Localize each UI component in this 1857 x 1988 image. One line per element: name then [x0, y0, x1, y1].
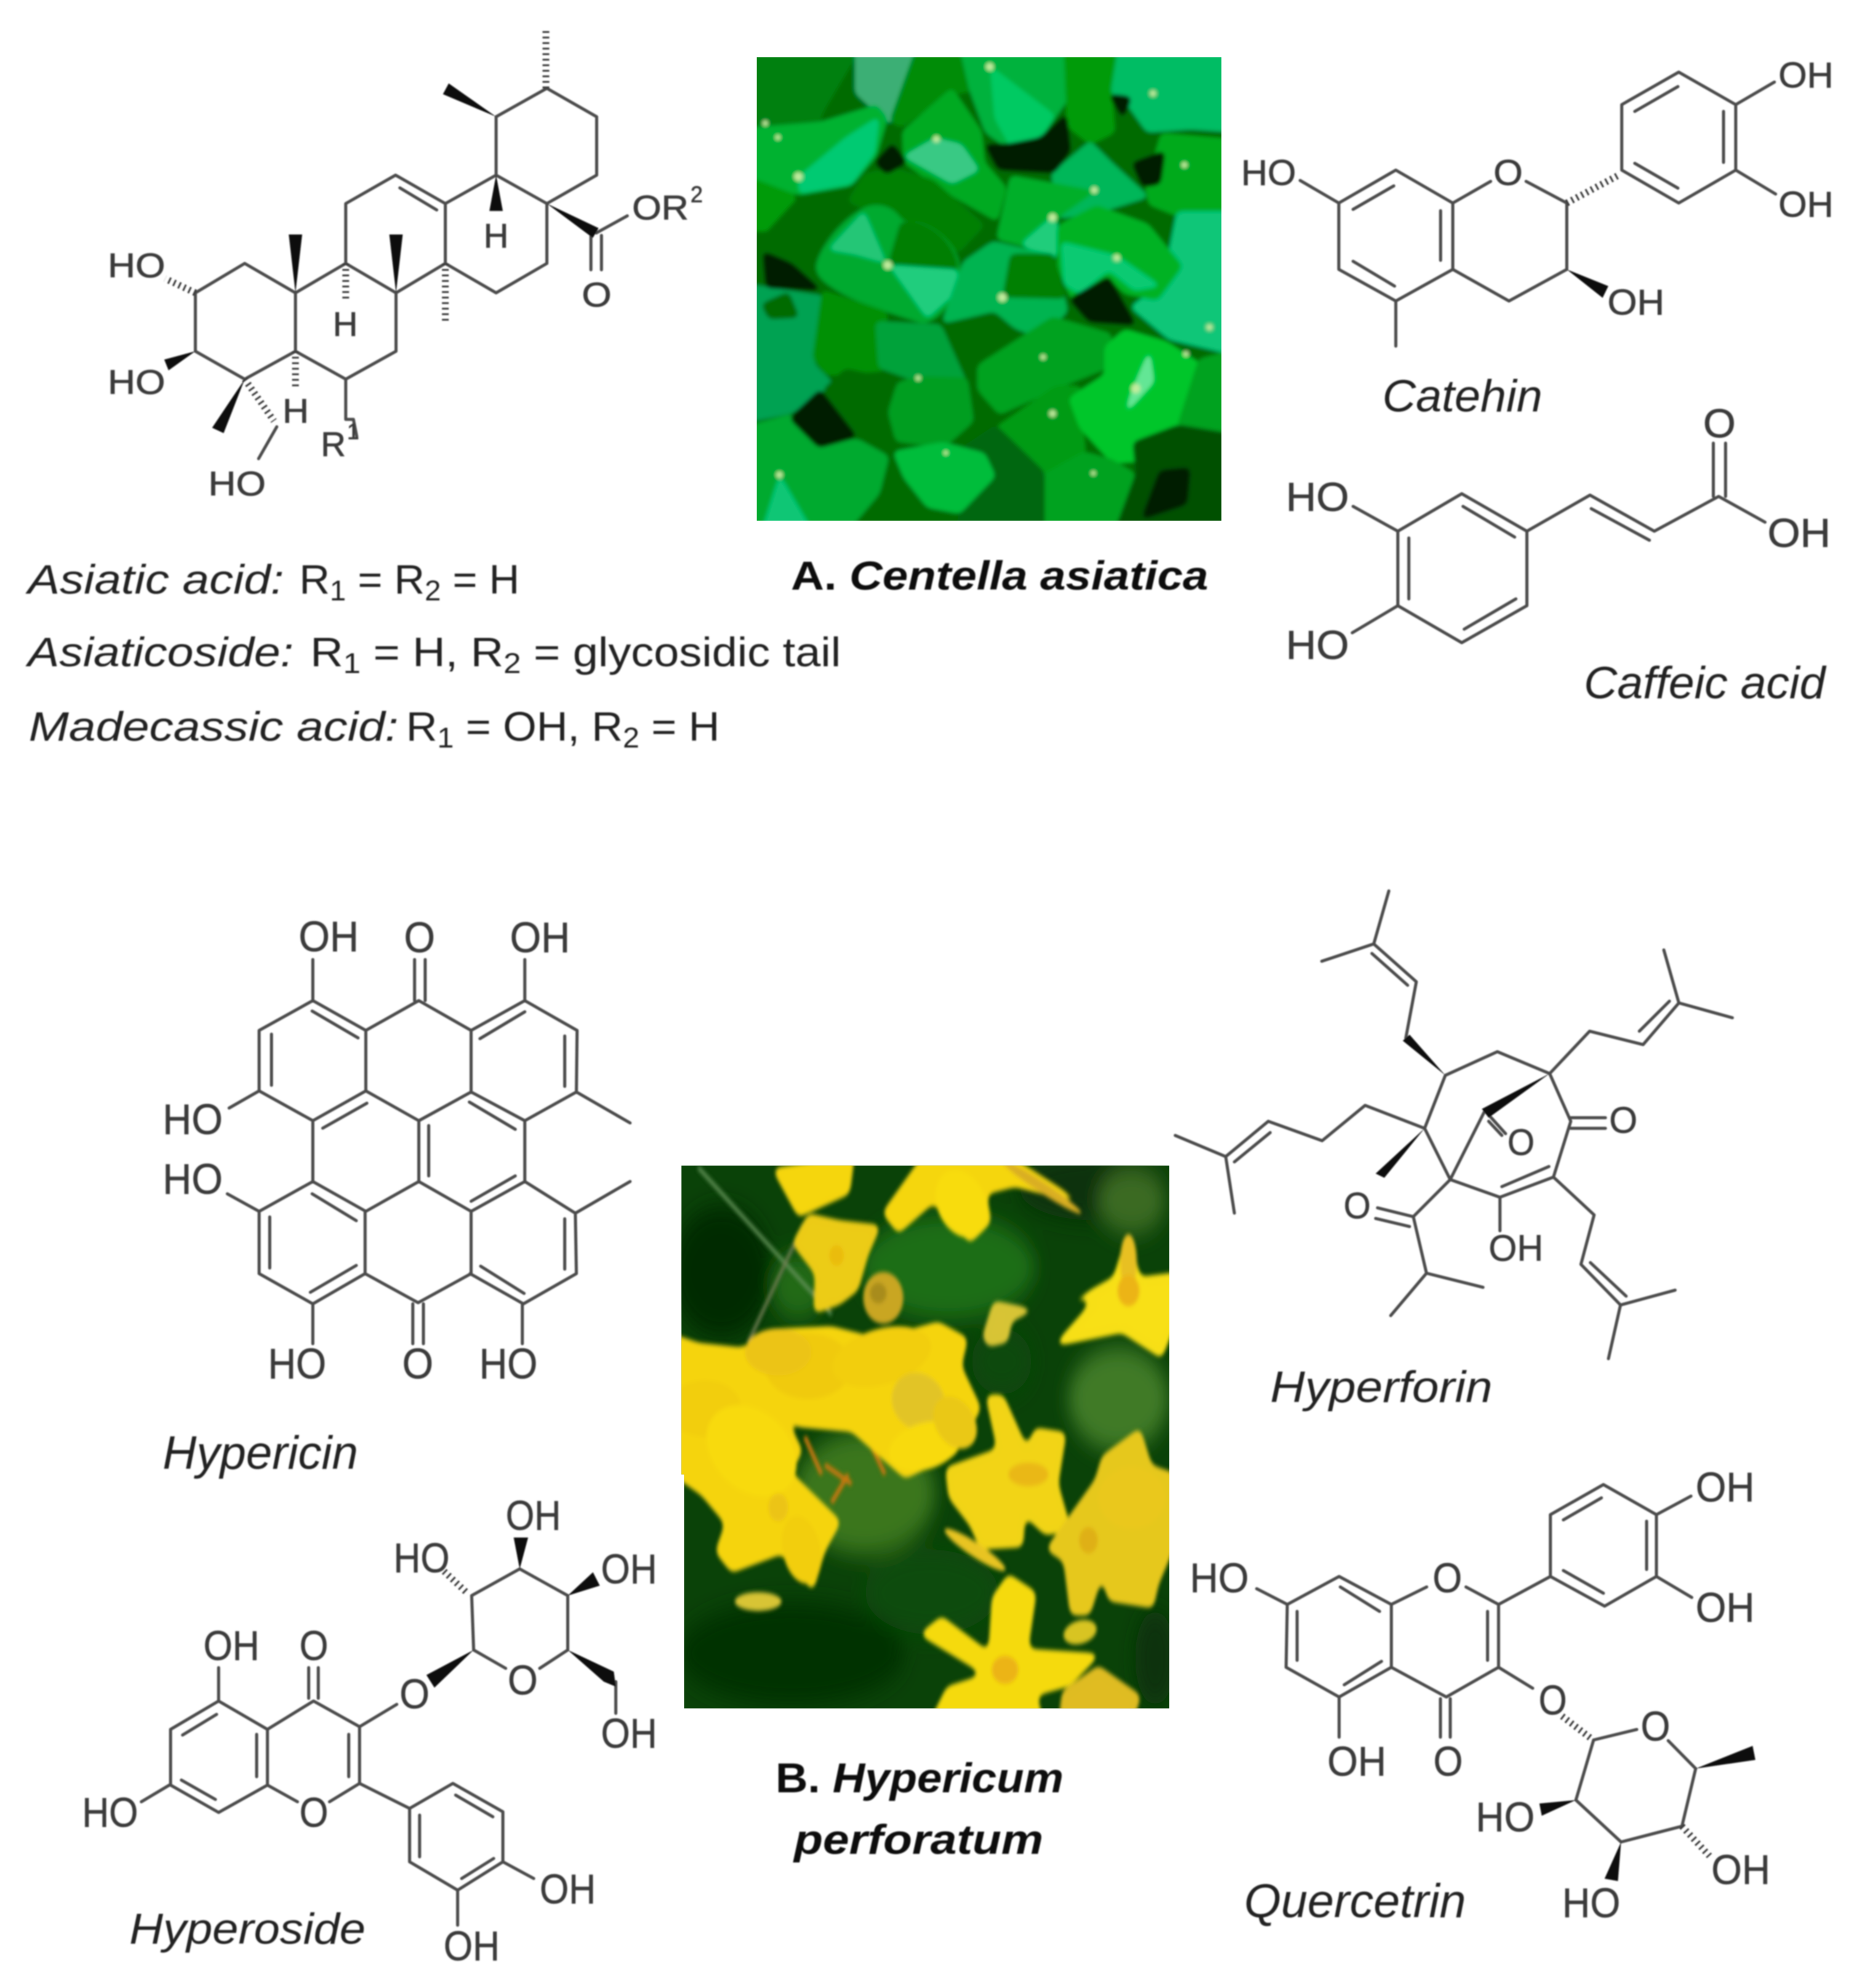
molecule: Hyperforin: O [1609, 1100, 1637, 1141]
molecule: Hypericin: O [404, 914, 435, 961]
molecule: Caffeic acid: O [1703, 401, 1736, 446]
text block: R-group definitions: R [406, 704, 435, 750]
photo: Hypericum perforatum flowers [668, 1154, 1179, 1724]
molecule: Hypericin: O [402, 1341, 433, 1388]
molecule: triterpene skeleton with R1 and R2: H [283, 391, 309, 430]
molecule: Catehin: HO [1241, 152, 1296, 193]
molecule: triterpene skeleton with R1 and R2: H [484, 217, 508, 255]
molecule: Hypericin: HO [162, 1156, 223, 1203]
text block: R-group definitions [25, 557, 841, 754]
molecule: Quercetrin: O [1434, 1738, 1463, 1785]
caption: A. Centella asiatica: A. Centella asiatica [791, 553, 1208, 598]
molecule: Hyperforin: Hyperforin [1270, 1362, 1493, 1412]
molecule: Hyperoside [82, 1492, 657, 1969]
molecule: triterpene skeleton with R1 and R2: 2 [691, 182, 703, 207]
molecule: Quercetrin: O [1539, 1677, 1567, 1724]
text block: R-group definitions: = OH, R [454, 704, 623, 750]
molecule: Catehin: OH [1778, 183, 1834, 224]
text block: R-group definitions: 1 [343, 647, 361, 679]
molecule: Hypericin: HO [162, 1096, 223, 1144]
molecule: Hypericin: HO [479, 1341, 537, 1388]
molecule: Hyperforin: O [1344, 1185, 1371, 1227]
molecule: Hypericin: Hypericin [162, 1426, 358, 1479]
molecule: triterpene skeleton with R1 and R2: R [321, 425, 346, 463]
molecule: Hyperforin [1175, 891, 1733, 1412]
text block: R-group definitions: Asiatic acid: [25, 557, 284, 603]
text block: R-group definitions: = H, R [361, 630, 503, 676]
text block: R-group definitions: 2 [425, 575, 441, 607]
molecule: triterpene skeleton with R1 and R2: O [582, 276, 612, 314]
molecule: Hypericin: OH [510, 914, 570, 961]
molecule: Quercetrin: HO [1476, 1794, 1534, 1841]
text block: R-group definitions: = H [441, 557, 519, 603]
molecule: Hyperoside: OH [601, 1710, 657, 1757]
molecule: Catehin: Catehin [1382, 371, 1542, 421]
molecule: Caffeic acid: HO [1286, 475, 1349, 520]
molecule: Catehin: OH [1778, 55, 1834, 95]
molecule: Caffeic acid: HO [1286, 623, 1349, 668]
text block: R-group definitions: R [310, 630, 339, 676]
caption: B. Hypericum perforatum [776, 1755, 1064, 1863]
molecule: triterpene skeleton with R1 and R2: HO [108, 246, 165, 284]
molecule: Hyperoside: OH [540, 1866, 596, 1912]
text block: R-group definitions: Asiaticoside: [25, 630, 294, 676]
molecule: Quercetrin: OH [1711, 1846, 1770, 1893]
molecule: Quercetrin: HO [1562, 1880, 1620, 1926]
molecule: Hypericin: OH [299, 913, 359, 961]
molecule: Quercetrin: HO [1190, 1555, 1249, 1601]
molecule: triterpene skeleton with R1 and R2: HO [208, 464, 266, 503]
photo: Centella asiatica leaves [757, 57, 1221, 521]
molecule: Hyperforin: OH [1489, 1228, 1543, 1269]
text block: R-group definitions: 1 [437, 722, 454, 754]
molecule: Quercetrin: Quercetrin [1244, 1875, 1466, 1928]
molecule: Quercetrin: O [1641, 1703, 1670, 1750]
text block: R-group definitions: R [299, 557, 328, 603]
molecule: triterpene skeleton with R1 and R2 [108, 30, 703, 503]
molecule: Catehin [1241, 55, 1834, 421]
molecule: Caffeic acid: Caffeic acid [1584, 657, 1827, 708]
molecule: Hyperoside: HO [393, 1534, 450, 1581]
text block: R-group definitions: Madecassic acid: [29, 704, 398, 750]
molecule: triterpene skeleton with R1 and R2: H [333, 305, 358, 343]
molecule: Hyperoside: OH [203, 1622, 260, 1669]
molecule: Hyperoside: HO [82, 1789, 138, 1836]
molecule: Hyperoside: O [300, 1622, 328, 1669]
molecule: Quercetrin: OH [1696, 1584, 1755, 1631]
text block: R-group definitions: 2 [623, 722, 640, 754]
molecule: Hyperoside: O [399, 1670, 430, 1717]
molecule: Hyperforin: O [1507, 1122, 1534, 1163]
molecule: Hyperoside: Hyperoside [129, 1905, 366, 1953]
molecule: Caffeic acid [1286, 401, 1831, 708]
text block: R-group definitions: 1 [330, 575, 346, 607]
molecule: Quercetrin: OH [1696, 1464, 1755, 1510]
text block: R-group definitions: = H [640, 704, 720, 750]
molecule: Hyperoside: OH [601, 1545, 657, 1592]
caption: B. Hypericum perforatum: B. Hypericum [776, 1755, 1064, 1802]
molecule: Quercetrin [1190, 1464, 1770, 1928]
molecule: triterpene skeleton with R1 and R2: 1 [347, 419, 359, 444]
molecule: Hyperoside: O [508, 1656, 538, 1703]
molecule: Hypericin [162, 913, 630, 1479]
molecule: Hypericin: HO [268, 1341, 326, 1388]
caption: B. Hypericum perforatum: perforatum [793, 1816, 1043, 1863]
text block: R-group definitions: = glycosidic tail [521, 630, 841, 676]
molecule: Hyperoside: O [300, 1789, 328, 1836]
molecule: triterpene skeleton with R1 and R2: OR [632, 188, 689, 226]
molecule: Hyperoside: OH [506, 1492, 561, 1539]
molecule: Catehin: OH [1608, 281, 1664, 323]
molecule: Quercetrin: O [1432, 1555, 1462, 1601]
text block: R-group definitions: 2 [503, 647, 521, 679]
molecule: Catehin: O [1493, 152, 1523, 193]
molecule: triterpene skeleton with R1 and R2: HO [108, 363, 165, 401]
molecule: Caffeic acid: OH [1768, 511, 1831, 556]
molecule: Quercetrin: OH [1327, 1738, 1386, 1785]
molecule: Hyperoside: OH [444, 1922, 500, 1969]
text block: R-group definitions: = R [346, 557, 425, 603]
